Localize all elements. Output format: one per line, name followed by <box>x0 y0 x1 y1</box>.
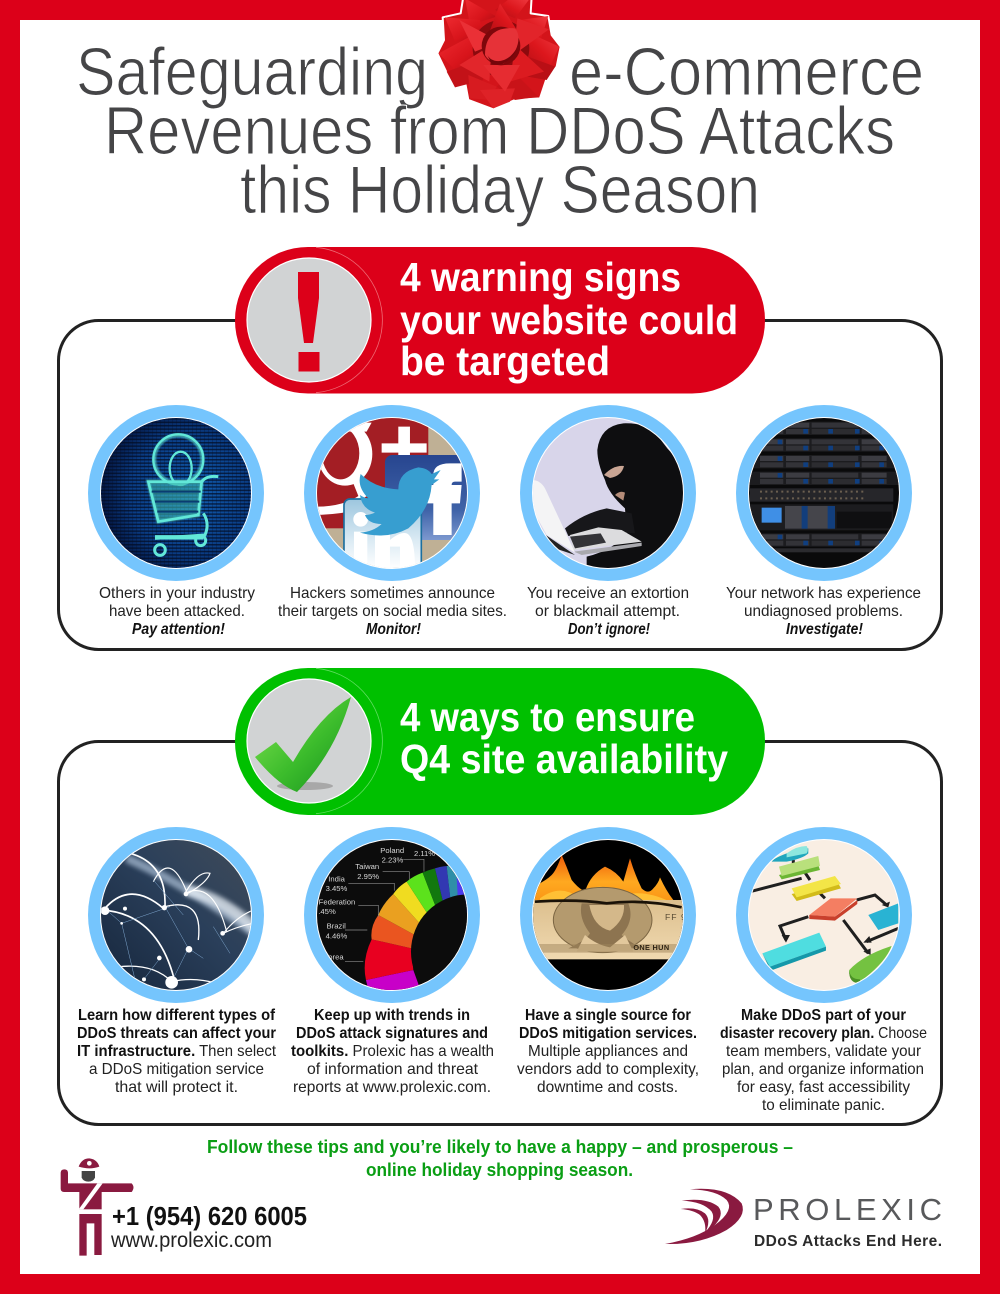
title <box>76 34 924 228</box>
banner heading: 4 ways to ensure <box>400 694 695 740</box>
chart: attack sources by country: 3.45% <box>326 884 348 893</box>
logo: Prolexic <box>665 1189 942 1250</box>
banner heading: Q4 site availability <box>400 736 728 782</box>
banner heading: 4 warning signs <box>400 254 681 300</box>
chart: attack sources by country: Federation <box>319 898 355 907</box>
chart: attack sources by country: Taiwan <box>355 862 379 871</box>
caption: others in your industry <box>99 585 255 638</box>
image: burning dollar bill <box>520 827 696 1003</box>
caption: trends: reports at www.prolexic.com. <box>293 1079 491 1096</box>
panel outline <box>58 320 942 650</box>
banner heading <box>400 254 738 384</box>
caption: threat types: that will protect it. <box>115 1079 238 1096</box>
closing message <box>207 1136 793 1180</box>
caption: trends: Keep up with trends in <box>314 1007 470 1024</box>
chart: attack sources by country: Poland <box>380 846 404 855</box>
chart: attack sources by country: 4.46% <box>326 931 348 940</box>
caption: single source: vendors add to complexity, <box>517 1061 699 1078</box>
caption: disaster recovery plan: disaster recovery plan. Choose <box>720 1025 927 1042</box>
caption: threat types <box>77 1007 277 1096</box>
chart: attack sources by country <box>304 827 480 1003</box>
closing message: Follow these tips and you’re likely to have a happy – and prosperous – <box>207 1136 793 1157</box>
image: 3D flowchart <box>736 827 912 1003</box>
caption: trends: DDoS attack signatures and <box>296 1025 488 1042</box>
caption: hackers announce targets: Hackers sometimes announce <box>290 585 495 602</box>
icon: exclamation mark <box>247 258 371 382</box>
logo swoosh <box>665 1189 743 1244</box>
chart: attack sources by country: .45% <box>318 907 336 916</box>
caption: extortion attempt: You receive an extortion <box>527 585 689 602</box>
banner heading: your website could <box>400 297 738 343</box>
caption: trends: of information and threat <box>307 1061 479 1078</box>
title: this Holiday Season <box>240 152 760 228</box>
caption: undiagnosed network problems: Your network has experience <box>726 585 921 602</box>
caption: trends <box>291 1007 494 1096</box>
caption: threat types: DDoS threats can affect your <box>77 1025 276 1042</box>
panel outline <box>58 742 942 1124</box>
icon: red ribbon bow <box>437 0 561 109</box>
banner: ways to ensure availability <box>235 668 765 815</box>
closing message: online holiday shopping season. <box>366 1159 633 1180</box>
banner heading: be targeted <box>400 338 610 384</box>
caption: others in your industry: Pay attention! <box>132 621 226 638</box>
caption: single source: downtime and costs. <box>537 1079 678 1096</box>
caption: extortion attempt <box>527 585 689 638</box>
caption: undiagnosed network problems: Investigate! <box>786 621 864 638</box>
caption: undiagnosed network problems <box>726 585 921 638</box>
title: e-Commerce <box>569 34 924 110</box>
caption: single source: Have a single source for <box>525 1007 691 1024</box>
caption: undiagnosed network problems: undiagnosed problems. <box>744 603 903 620</box>
caption: hackers announce targets <box>278 585 507 638</box>
panel: warning signs <box>58 247 942 650</box>
image: server rack <box>736 405 912 581</box>
caption: others in your industry: Others in your industry <box>99 585 255 602</box>
caption: disaster recovery plan: team members, validate your <box>726 1043 922 1060</box>
image: burning dollar bill: ONE HUN <box>633 943 669 952</box>
caption: disaster recovery plan: Make DDoS part of your <box>741 1007 906 1024</box>
caption: threat types: IT infrastructure. Then select <box>77 1043 277 1060</box>
contact details <box>110 1201 307 1252</box>
caption: disaster recovery plan <box>720 1007 927 1114</box>
title: Revenues from DDoS Attacks <box>104 93 895 169</box>
caption: extortion attempt: Don’t ignore! <box>568 621 651 638</box>
panel: ways to ensure availability <box>58 668 942 1124</box>
caption: single source: DDoS mitigation services. <box>519 1025 697 1042</box>
chart: attack sources by country: India <box>328 874 346 883</box>
icon: traffic officer <box>61 1158 133 1256</box>
image: network arcs over globe <box>88 827 264 1003</box>
caption: threat types: a DDoS mitigation service <box>89 1061 264 1078</box>
caption: single source: Multiple appliances and <box>528 1043 688 1060</box>
title: Safeguarding <box>76 34 428 110</box>
caption: single source <box>517 1007 699 1096</box>
logo: Prolexic: PROLEXIC <box>753 1192 942 1227</box>
banner: warning signs <box>235 247 765 394</box>
image: burning dollar bill: FF 9 <box>665 912 687 922</box>
contact details: www.prolexic.com <box>110 1229 272 1252</box>
banner heading <box>400 694 728 782</box>
caption: disaster recovery plan: to eliminate panic. <box>762 1097 885 1114</box>
chart: attack sources by country: orea <box>328 953 344 962</box>
caption: threat types: Learn how different types of <box>78 1007 276 1024</box>
chart: attack sources by country: 2.11% <box>414 849 435 858</box>
chart: attack sources by country: 2.23% <box>382 856 404 865</box>
image: masked hacker with laptop <box>520 405 696 581</box>
contact details: +1 (954) 620 6005 <box>112 1201 307 1231</box>
chart: attack sources by country: 2.95% <box>357 872 379 881</box>
image: shopping cart on circuit <box>88 405 264 581</box>
chart: attack sources by country: Brazil <box>327 921 346 930</box>
icon: green check mark <box>247 679 371 803</box>
caption: hackers announce targets: Monitor! <box>366 621 422 638</box>
caption: others in your industry: have been attacked. <box>109 603 245 620</box>
logo: Prolexic: DDoS Attacks End Here. <box>754 1233 942 1250</box>
caption: hackers announce targets: their targets on social media sites. <box>278 603 507 620</box>
caption: disaster recovery plan: plan, and organize information <box>722 1061 924 1078</box>
caption: extortion attempt: or blackmail attempt. <box>535 603 680 620</box>
caption: trends: toolkits. Prolexic has a wealth <box>291 1043 494 1060</box>
image: social media logos <box>304 405 480 581</box>
caption: disaster recovery plan: for easy, fast accessibility <box>737 1079 910 1096</box>
